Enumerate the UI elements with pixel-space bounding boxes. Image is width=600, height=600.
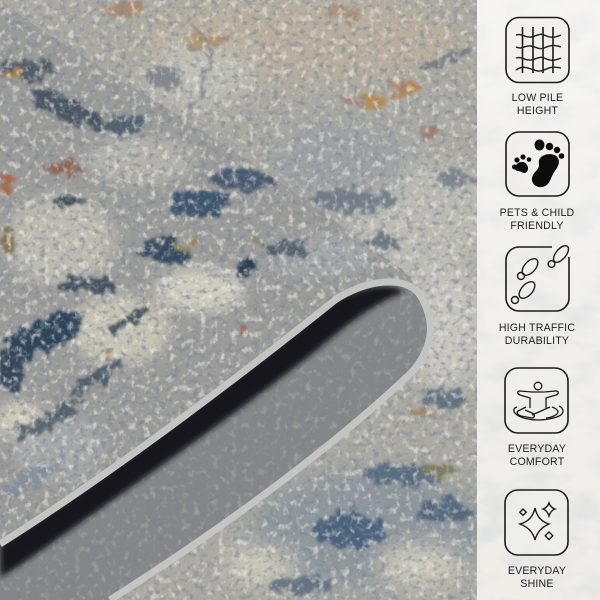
icon: sparkles — [505, 490, 568, 555]
label: SHINE — [520, 578, 554, 590]
label: COMFORT — [510, 456, 565, 468]
icon: paw and foot — [506, 132, 569, 196]
icon: pile weave — [506, 18, 569, 82]
feature: everyday shine — [505, 490, 568, 590]
rug edge binding — [0, 282, 430, 600]
feature: low pile height — [506, 18, 569, 117]
label: LOW PILE — [512, 92, 563, 104]
label: DURABILITY — [505, 335, 569, 347]
label: HEIGHT — [517, 105, 558, 117]
label: HIGH TRAFFIC — [499, 322, 575, 334]
right side panel — [477, 0, 600, 600]
label: EVERYDAY — [508, 443, 566, 455]
rug underside and dark shadow — [0, 280, 440, 600]
label: EVERYDAY — [508, 565, 566, 577]
icon: footprints — [506, 243, 571, 311]
feature: pets and child friendly — [500, 132, 575, 232]
icon: meditating figure — [505, 368, 568, 433]
feature: high traffic durability — [499, 243, 575, 347]
label: FRIENDLY — [510, 220, 564, 232]
folded rug front face — [0, 2, 416, 540]
label: PETS & CHILD — [500, 207, 575, 219]
feature: everyday comfort — [505, 368, 568, 468]
